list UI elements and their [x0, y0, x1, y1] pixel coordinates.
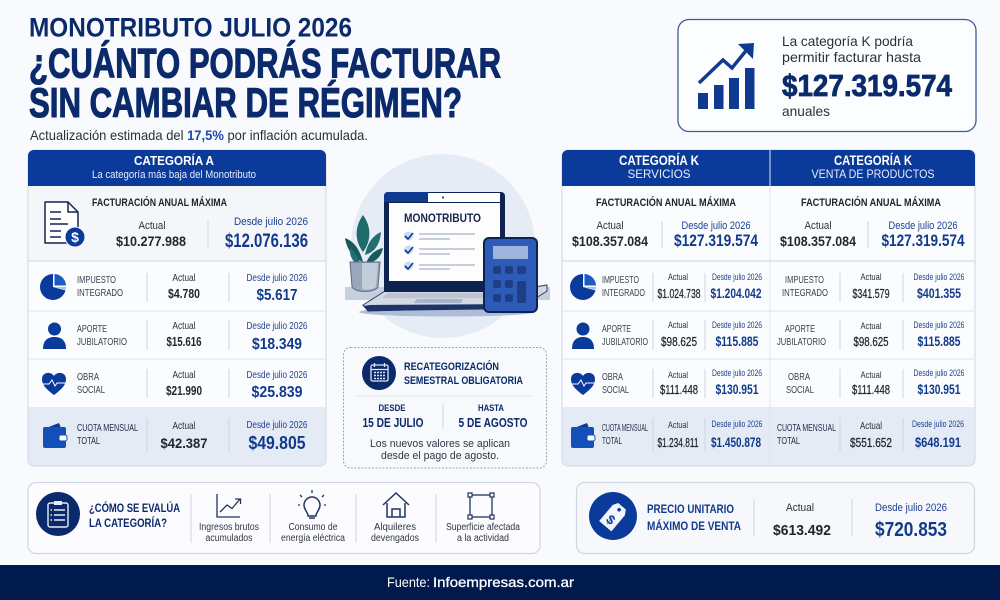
row: impuesto integrado: Actual [172, 272, 196, 284]
annual billing: Actual [138, 220, 166, 232]
row: impuesto integrado K: INTEGRADO [602, 287, 645, 299]
row: aporte jubilatorio K: Actual [668, 320, 688, 331]
annual billing: productos: $108.357.084 [780, 233, 856, 249]
annual billing: servicios: Actual [596, 220, 624, 232]
row: impuesto integrado K: Desde julio 2026 [712, 272, 762, 283]
annual billing: productos: Desde julio 2026 [888, 220, 958, 232]
title [29, 12, 501, 126]
icon: heart [42, 373, 66, 395]
icon: invoice [45, 202, 85, 247]
row: cuota mensual K: $1.450.878 [711, 434, 761, 450]
row: obra social K: OBRA [788, 371, 810, 383]
row: aporte jubilatorio K: $98.625 [661, 335, 697, 349]
row: obra social K: OBRA [602, 371, 623, 383]
icon: invoice: $ [71, 229, 79, 245]
row: aporte jubilatorio K: $115.885 [716, 333, 759, 349]
row: cuota mensual K: CUOTA MENSUAL [777, 422, 836, 434]
icon: clipboard [36, 492, 80, 536]
row: cuota mensual K: CUOTA MENSUAL [602, 422, 648, 434]
footer: Infoempresas.com.ar [433, 574, 574, 590]
row: aporte jubilatorio: JUBILATORIO [77, 336, 127, 348]
item: alquileres [371, 493, 419, 544]
icon: price tag [589, 492, 637, 540]
annual billing: productos: FACTURACIÓN ANUAL MÁXIMA [801, 196, 941, 209]
row: obra social K: Desde julio 2026 [914, 368, 964, 379]
panel: categoría K [562, 150, 975, 466]
item: superficie [446, 493, 520, 544]
row: cuota mensual total: CUOTA MENSUAL [77, 422, 138, 434]
row: cuota mensual K: Desde julio 2026 [912, 419, 964, 430]
row: obra social: SOCIAL [77, 384, 105, 396]
icon: wallet K [571, 423, 595, 448]
icon: price tag: $ [603, 512, 619, 528]
icon: plant [345, 215, 383, 292]
values: $613.492 [773, 522, 831, 539]
row: obra social K: $130.951 [918, 381, 961, 397]
row: impuesto integrado K: IMPUESTO [785, 274, 824, 286]
row: cuota mensual total [43, 418, 308, 453]
heading: PRECIO UNITARIO [647, 502, 734, 516]
annual billing: $12.076.136 [225, 231, 308, 252]
row: aporte jubilatorio K: APORTE [602, 323, 631, 335]
footer [0, 565, 1000, 600]
callout text [782, 33, 953, 119]
row: cuota mensual K: $1.234.811 [658, 436, 699, 450]
row: obra social: Desde julio 2026 [246, 369, 308, 381]
heading: LA CATEGORÍA? [89, 515, 167, 530]
panel: precio unitario [576, 482, 974, 554]
row: impuesto integrado K: INTEGRADO [782, 287, 828, 299]
dates [362, 403, 528, 430]
row: aporte jubilatorio: Desde julio 2026 [246, 320, 308, 332]
checklist [404, 232, 475, 270]
row: obra social [42, 369, 308, 401]
row: aporte jubilatorio K [572, 320, 964, 349]
callout text: permitir facturar hasta [782, 49, 921, 65]
header: VENTA DE PRODUCTOS [812, 167, 934, 181]
item: ingresos: Ingresos brutos [199, 522, 259, 533]
laptop base [363, 285, 547, 311]
item: energía: Consumo de [288, 522, 338, 533]
illustration: laptop and calculator [345, 154, 550, 338]
row: obra social K: Actual [860, 370, 882, 381]
callout text: $127.319.574 [782, 68, 953, 103]
row: impuesto integrado K: Desde julio 2026 [914, 272, 964, 283]
item: superficie: a la actividad [457, 533, 509, 544]
row: aporte jubilatorio K: $98.625 [854, 335, 889, 349]
dates: DESDE [378, 403, 406, 414]
callout: top limit [678, 20, 976, 132]
row: aporte jubilatorio K: Desde julio 2026 [914, 320, 964, 331]
row: obra social K [571, 368, 964, 397]
item: alquileres: devengados [371, 533, 419, 544]
header: CATEGORÍA K [619, 152, 699, 168]
header: La categoría más baja del Monotributo [92, 169, 256, 181]
callout text: anuales [782, 103, 830, 119]
item: alquileres: Alquileres [374, 522, 416, 533]
row: obra social K: $111.448 [852, 383, 890, 397]
row: cuota mensual K: $551.652 [850, 436, 892, 450]
title: ¿CUÁNTO PODRÁS FACTURAR [29, 40, 501, 86]
annual billing [92, 196, 308, 252]
laptop screen [384, 192, 505, 292]
row: aporte jubilatorio: APORTE [77, 323, 107, 335]
panel: cómo se evalúa [28, 482, 540, 554]
calculator [484, 238, 537, 312]
icon: wallet [43, 423, 67, 448]
header: SERVICIOS [628, 167, 690, 181]
laptop screen: MONOTRIBUTO [404, 211, 481, 225]
row: impuesto integrado: Desde julio 2026 [246, 272, 308, 284]
item: energía: energía eléctrica [281, 533, 345, 544]
row: cuota mensual total: $42.387 [160, 435, 208, 451]
row: obra social K: SOCIAL [786, 384, 814, 396]
note: desde el pago de agosto. [381, 450, 499, 462]
row: aporte jubilatorio K: $115.885 [918, 333, 961, 349]
annual billing: servicios: $108.357.084 [572, 233, 648, 249]
row: aporte jubilatorio K: APORTE [785, 323, 815, 335]
heading [89, 500, 180, 530]
row: aporte jubilatorio: $15.616 [166, 334, 202, 349]
panel: categoría A [28, 150, 326, 466]
row: aporte jubilatorio: $18.349 [252, 336, 302, 353]
row: impuesto integrado: $4.780 [168, 286, 200, 301]
row: cuota mensual K [571, 419, 964, 450]
icon: person K [572, 322, 594, 349]
row: obra social K: $111.448 [660, 383, 698, 397]
header: CATEGORÍA A [134, 153, 215, 168]
callout text: La categoría K podría [782, 33, 913, 49]
row: aporte jubilatorio K: JUBILATORIO [777, 336, 826, 348]
row: cuota mensual K: Actual [668, 420, 688, 431]
row: aporte jubilatorio K: JUBILATORIO [602, 336, 648, 348]
annual billing: productos: $127.319.574 [882, 231, 965, 250]
heading [647, 502, 741, 533]
subtitle: Actualización estimada del 17,5% por inflación acumulada. [30, 127, 368, 143]
row: cuota mensual K: TOTAL [777, 435, 800, 447]
item: superficie: Superficie afectada [446, 522, 520, 533]
row: cuota mensual K: $648.191 [915, 434, 961, 450]
item: ingresos: acumulados [206, 533, 252, 544]
annual billing: $10.277.988 [116, 233, 186, 249]
row: obra social K: SOCIAL [602, 384, 629, 396]
annual billing: servicios: $127.319.574 [674, 231, 758, 250]
row: aporte jubilatorio K: Desde julio 2026 [712, 320, 762, 331]
annual billing: productos: Actual [804, 220, 832, 232]
annual billing: FACTURACIÓN ANUAL MÁXIMA [92, 196, 227, 209]
icon: pie [40, 274, 66, 300]
header [28, 150, 326, 186]
row: cuota mensual total: Desde julio 2026 [246, 419, 308, 431]
annual billing: servicios [572, 196, 758, 250]
row: aporte jubilatorio: Actual [172, 320, 196, 332]
item: energía [281, 490, 345, 544]
row: impuesto integrado K: $1.024.738 [658, 287, 701, 301]
row: cuota mensual K: Desde julio 2026 [712, 419, 762, 430]
header: CATEGORÍA K [834, 152, 912, 168]
row: impuesto integrado K [570, 272, 964, 301]
row: aporte jubilatorio [43, 320, 308, 353]
note: Los nuevos valores se aplican [370, 438, 510, 450]
row: obra social: OBRA [77, 371, 99, 383]
row: impuesto integrado K: Actual [668, 272, 688, 283]
icon: person [43, 322, 66, 349]
icon: pie K [570, 274, 596, 300]
values [773, 502, 947, 541]
row: cuota mensual total: TOTAL [77, 435, 100, 447]
heading: MÁXIMO DE VENTA [647, 518, 741, 533]
row: cuota mensual K: TOTAL [602, 435, 622, 447]
annual billing: servicios: FACTURACIÓN ANUAL MÁXIMA [596, 196, 736, 209]
row: impuesto integrado K: $401.355 [917, 285, 961, 301]
panel: recategorización [344, 348, 546, 468]
heading: ¿CÓMO SE EVALÚA [89, 500, 180, 515]
row: impuesto integrado: IMPUESTO [77, 274, 116, 286]
heading: RECATEGORIZACIÓN [404, 360, 499, 373]
annual billing: productos [780, 196, 965, 250]
icon: heart K [571, 373, 595, 395]
row: cuota mensual total: $49.805 [248, 433, 306, 453]
row: impuesto integrado [40, 272, 308, 304]
title: MONOTRIBUTO JULIO 2026 [29, 12, 352, 42]
header [562, 150, 975, 186]
dates: 15 DE JULIO [362, 415, 424, 430]
row: impuesto integrado: $5.617 [256, 287, 298, 304]
row: cuota mensual K: Actual [860, 421, 882, 432]
annual billing: servicios: Desde julio 2026 [682, 220, 750, 232]
heading: SEMESTRAL OBLIGATORIA [404, 375, 523, 387]
row: impuesto integrado K: $341.579 [852, 287, 890, 301]
row: obra social K: Desde julio 2026 [712, 368, 762, 379]
row: impuesto integrado K: Actual [860, 272, 882, 283]
vertical dividers [653, 273, 903, 452]
icon: calendar [362, 356, 396, 390]
title: SIN CAMBIAR DE RÉGIMEN? [29, 79, 462, 126]
values: $720.853 [875, 519, 947, 541]
heading [404, 360, 523, 387]
row: aporte jubilatorio K: Actual [860, 321, 882, 332]
row: obra social: $25.839 [252, 384, 303, 401]
row: impuesto integrado: INTEGRADO [77, 287, 123, 299]
row: obra social K: Actual [668, 370, 688, 381]
dates: 5 DE AGOSTO [458, 415, 528, 430]
icon: growth chart [698, 43, 754, 109]
row: obra social: $21.990 [166, 383, 202, 398]
row: obra social K: $130.951 [716, 381, 759, 397]
row: impuesto integrado K: $1.204.042 [710, 285, 762, 301]
row: obra social: Actual [172, 369, 196, 381]
row: impuesto integrado K: IMPUESTO [602, 274, 639, 286]
row: cuota mensual total: Actual [172, 420, 196, 432]
dates: HASTA [478, 403, 504, 414]
values: Actual [786, 502, 814, 514]
annual billing: Desde julio 2026 [234, 216, 308, 228]
item: ingresos [199, 494, 259, 544]
footer: Fuente: [387, 574, 430, 590]
note [370, 438, 510, 462]
values: Desde julio 2026 [875, 502, 947, 514]
